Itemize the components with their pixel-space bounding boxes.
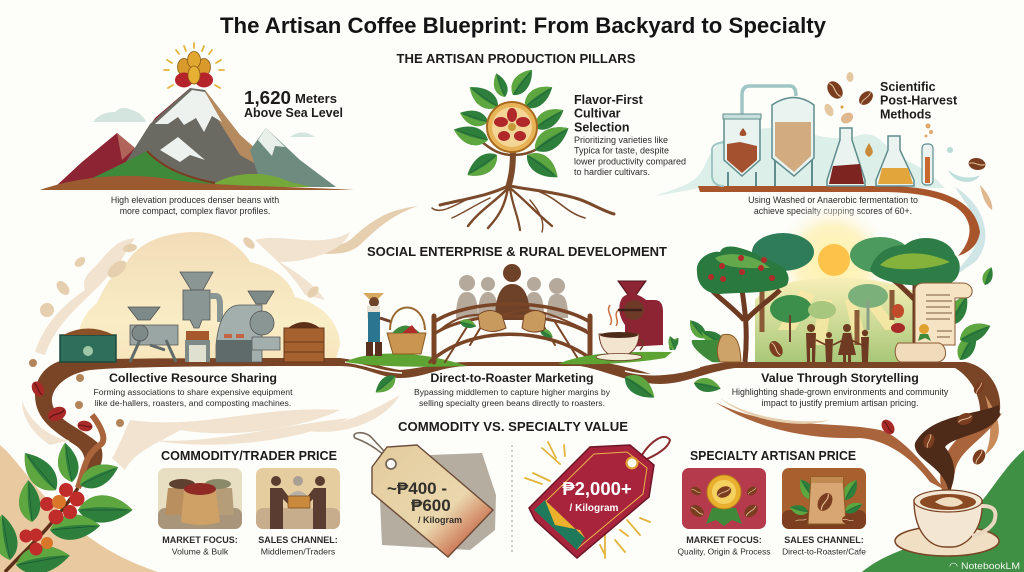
heading: commodity price: COMMODITY/TRADER PRICE bbox=[161, 449, 337, 463]
text: flavor-first description: Typica for taste, despite bbox=[574, 146, 669, 156]
text: altitude line two: Above Sea Level bbox=[244, 106, 343, 120]
text: scientific heading: Scientific bbox=[880, 80, 936, 94]
text block: value through storytelling: Highlighting shade-grown environments and community bbox=[732, 387, 949, 397]
river: flowing coffee band bbox=[22, 358, 1000, 490]
text block: collective resource sharing: Forming associations to share expensive equipment bbox=[94, 387, 293, 397]
text: flavor-first description: lower productivity compared bbox=[574, 156, 686, 166]
panel: cloud backdrop bbox=[35, 232, 350, 362]
caption: sales channel specialty: SALES CHANNEL: bbox=[784, 535, 864, 545]
text: altitude callout: 1,620 bbox=[244, 88, 291, 108]
caption: market focus specialty: MARKET FOCUS: bbox=[686, 535, 762, 545]
card: sales channel specialty bbox=[782, 468, 866, 529]
decor: bottom-right green corner bbox=[862, 450, 1024, 572]
price tag: specialty bbox=[525, 437, 670, 558]
text: flavor-first description: Prioritizing varieties like bbox=[574, 135, 668, 145]
text: scientific description: Using Washed or Anaerobic fermentation to bbox=[748, 195, 918, 205]
card: market focus commodity bbox=[158, 468, 242, 529]
icon: cultivar tree with roots bbox=[432, 65, 614, 232]
price tag: commodity bbox=[354, 433, 496, 557]
text: flavor-first description: to hardier cultivars. bbox=[574, 167, 650, 177]
card: market focus specialty bbox=[682, 468, 766, 529]
text block: collective resource sharing: Collective Resource Sharing bbox=[109, 371, 277, 385]
caption: sales channel specialty: Direct-to-Roaster/Cafe bbox=[782, 546, 866, 556]
caption: market focus commodity: Volume & Bulk bbox=[172, 546, 229, 556]
card: sales channel commodity bbox=[256, 468, 340, 529]
price tag: commodity: / Kilogram bbox=[418, 515, 462, 525]
text: scientific heading: Methods bbox=[880, 107, 931, 121]
icon: coffee branch with cherries bbox=[0, 415, 133, 572]
text: flavor-first heading: Flavor-First bbox=[574, 93, 644, 107]
icon: post-harvest lab equipment bbox=[656, 72, 992, 283]
text: flavor-first heading: Selection bbox=[574, 120, 630, 134]
price tag: specialty: ₱2,000+ bbox=[562, 478, 632, 499]
heading: social enterprise: SOCIAL ENTERPRISE & RURAL DEVELOPMENT bbox=[367, 245, 667, 259]
logo: NotebookLM watermark: ◠ NotebookLM bbox=[949, 561, 1020, 572]
icon: shade-grown forest and family bbox=[685, 202, 996, 364]
text: scientific heading: Post-Harvest bbox=[880, 94, 958, 108]
text block: direct-to-roaster marketing: Direct-to-Roaster Marketing bbox=[430, 371, 594, 385]
text block: value through storytelling: Value Through Storytelling bbox=[761, 371, 919, 385]
caption: sales channel commodity: Middlemen/Traders bbox=[261, 546, 336, 556]
icon: latte cup with swirl bbox=[895, 405, 1002, 556]
text block: collective resource sharing: like de-hallers, roasters, and composting machines. bbox=[95, 398, 291, 408]
icon: community bridge with people bbox=[430, 264, 595, 362]
price tag: specialty: / Kilogram bbox=[570, 503, 619, 514]
text block: direct-to-roaster marketing bbox=[414, 371, 611, 408]
text block: value through storytelling: impact to justify premium artisan pricing. bbox=[762, 398, 918, 408]
caption: market focus specialty: Quality, Origin & Process bbox=[678, 546, 770, 556]
text block: value through storytelling bbox=[732, 371, 949, 408]
caption: market focus commodity: MARKET FOCUS: bbox=[162, 535, 238, 545]
title: The Artisan Coffee Blueprint: From Backyard to Specialty bbox=[220, 13, 827, 38]
text: elevation description: High elevation produces denser beans with bbox=[111, 195, 279, 205]
connector: tan swirl from roots to cloud bbox=[290, 206, 418, 254]
text block: collective resource sharing bbox=[94, 371, 293, 408]
icon: farmer with basket bbox=[345, 293, 467, 367]
text block: direct-to-roaster marketing: selling specialty green beans directly to roasters. bbox=[419, 398, 605, 408]
text: elevation description: more compact, complex flavor profiles. bbox=[120, 206, 270, 216]
text block: direct-to-roaster marketing: Bypassing middlemen to capture higher margins by bbox=[414, 387, 611, 397]
heading: commodity vs specialty: COMMODITY VS. SPECIALTY VALUE bbox=[398, 420, 628, 434]
divider: dashed line bbox=[511, 445, 513, 555]
text: scientific description: achieve specialty cupping scores of 60+. bbox=[754, 206, 912, 216]
heading: production pillars: THE ARTISAN PRODUCTION PILLARS bbox=[396, 52, 636, 66]
price tag: commodity: ~₱400 - bbox=[387, 479, 447, 498]
price tag: commodity: ₱600 bbox=[411, 496, 451, 515]
icon: shared processing machines bbox=[60, 272, 324, 362]
text: altitude unit: Meters bbox=[295, 92, 337, 106]
icon: mountain with coffee cherries bbox=[40, 43, 354, 190]
decor: bottom-left beige corner bbox=[0, 445, 158, 572]
text: flavor-first heading: Cultivar bbox=[574, 107, 621, 121]
caption: sales channel commodity: SALES CHANNEL: bbox=[258, 535, 338, 545]
icon: roaster and coffee cup bbox=[558, 281, 681, 364]
heading: specialty price: SPECIALTY ARTISAN PRICE bbox=[690, 449, 856, 463]
